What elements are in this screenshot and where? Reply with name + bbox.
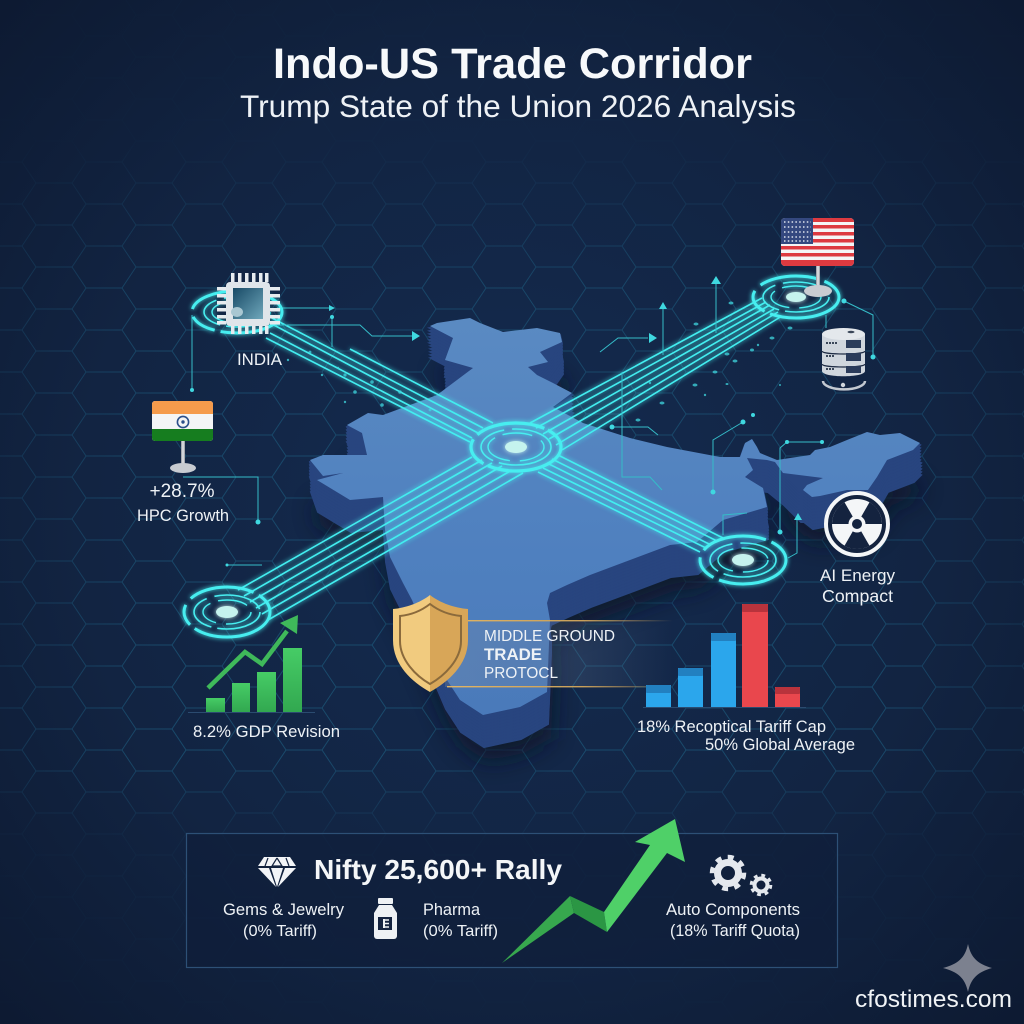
circuit traces xyxy=(183,276,876,566)
watermark: cfostimes.com xyxy=(855,986,1012,1013)
label: gems: Gems & Jewelry xyxy=(223,901,345,919)
map of India xyxy=(310,318,924,761)
icon: US flag xyxy=(781,218,854,297)
icon: India flag xyxy=(152,401,213,473)
label: gems xyxy=(223,901,345,940)
label: AI Energy Compact: AI Energy xyxy=(820,566,895,585)
label: auto components: (18% Tariff Quota) xyxy=(670,922,800,940)
arrow: rally xyxy=(502,819,685,963)
banner: middle ground trade protocol: MIDDLE GROUND xyxy=(484,628,615,645)
icon: chip xyxy=(217,273,280,334)
icon: radiation xyxy=(826,493,888,555)
lines: centre to north-east xyxy=(530,298,782,450)
icon: pharma bottle xyxy=(374,898,397,939)
node: north-east xyxy=(753,276,839,318)
subtitle: Trump State of the Union 2026 Analysis xyxy=(240,88,796,124)
label: auto components xyxy=(666,901,800,940)
label: tariff cap xyxy=(637,718,855,754)
icon: database xyxy=(822,328,865,389)
corridor lines xyxy=(238,298,782,620)
label: GDP revision: 8.2% GDP Revision xyxy=(193,722,340,741)
icon: diamond xyxy=(258,857,296,887)
stat: HPC growth: HPC Growth xyxy=(137,507,229,525)
hexagon pattern xyxy=(0,168,1024,834)
lines: south-west to centre xyxy=(238,457,523,620)
icon: gears xyxy=(712,857,771,895)
label: tariff cap: 50% Global Average xyxy=(705,736,855,754)
panel: Nifty rally xyxy=(186,819,838,968)
node: centre hub xyxy=(471,423,561,471)
node: south-west xyxy=(184,587,270,637)
chart: GDP growth xyxy=(188,615,315,713)
label: auto components: Auto Components xyxy=(666,901,800,919)
label: INDIA: INDIA xyxy=(237,350,283,369)
node: south-east xyxy=(700,536,786,584)
label: AI Energy Compact: Compact xyxy=(822,586,893,606)
title: Indo-US Trade Corridor xyxy=(273,40,752,88)
lines: west to centre xyxy=(266,317,493,442)
stat: HPC growth xyxy=(137,481,229,525)
banner: middle ground trade protocol: TRADE xyxy=(484,645,542,664)
icon: gold shield xyxy=(393,595,468,692)
label: pharma: (0% Tariff) xyxy=(423,923,498,940)
bar chart: tariff xyxy=(643,604,806,708)
banner: middle ground trade protocol: PROTOCL xyxy=(484,665,558,682)
label: gems: (0% Tariff) xyxy=(243,923,317,940)
icon: sparkle xyxy=(943,944,992,992)
heading: Nifty rally: Nifty 25,600+ Rally xyxy=(314,854,562,885)
banner: middle ground trade protocol xyxy=(445,620,673,687)
label: AI Energy Compact xyxy=(820,566,895,606)
lines: centre to south-east xyxy=(538,455,723,552)
data particles xyxy=(287,302,792,422)
node: north-west xyxy=(192,291,282,333)
label: tariff cap: 18% Recoptical Tariff Cap xyxy=(637,718,826,736)
stat: HPC growth: +28.7% xyxy=(150,481,215,502)
label: pharma: Pharma xyxy=(423,901,481,919)
label: pharma xyxy=(423,901,498,940)
